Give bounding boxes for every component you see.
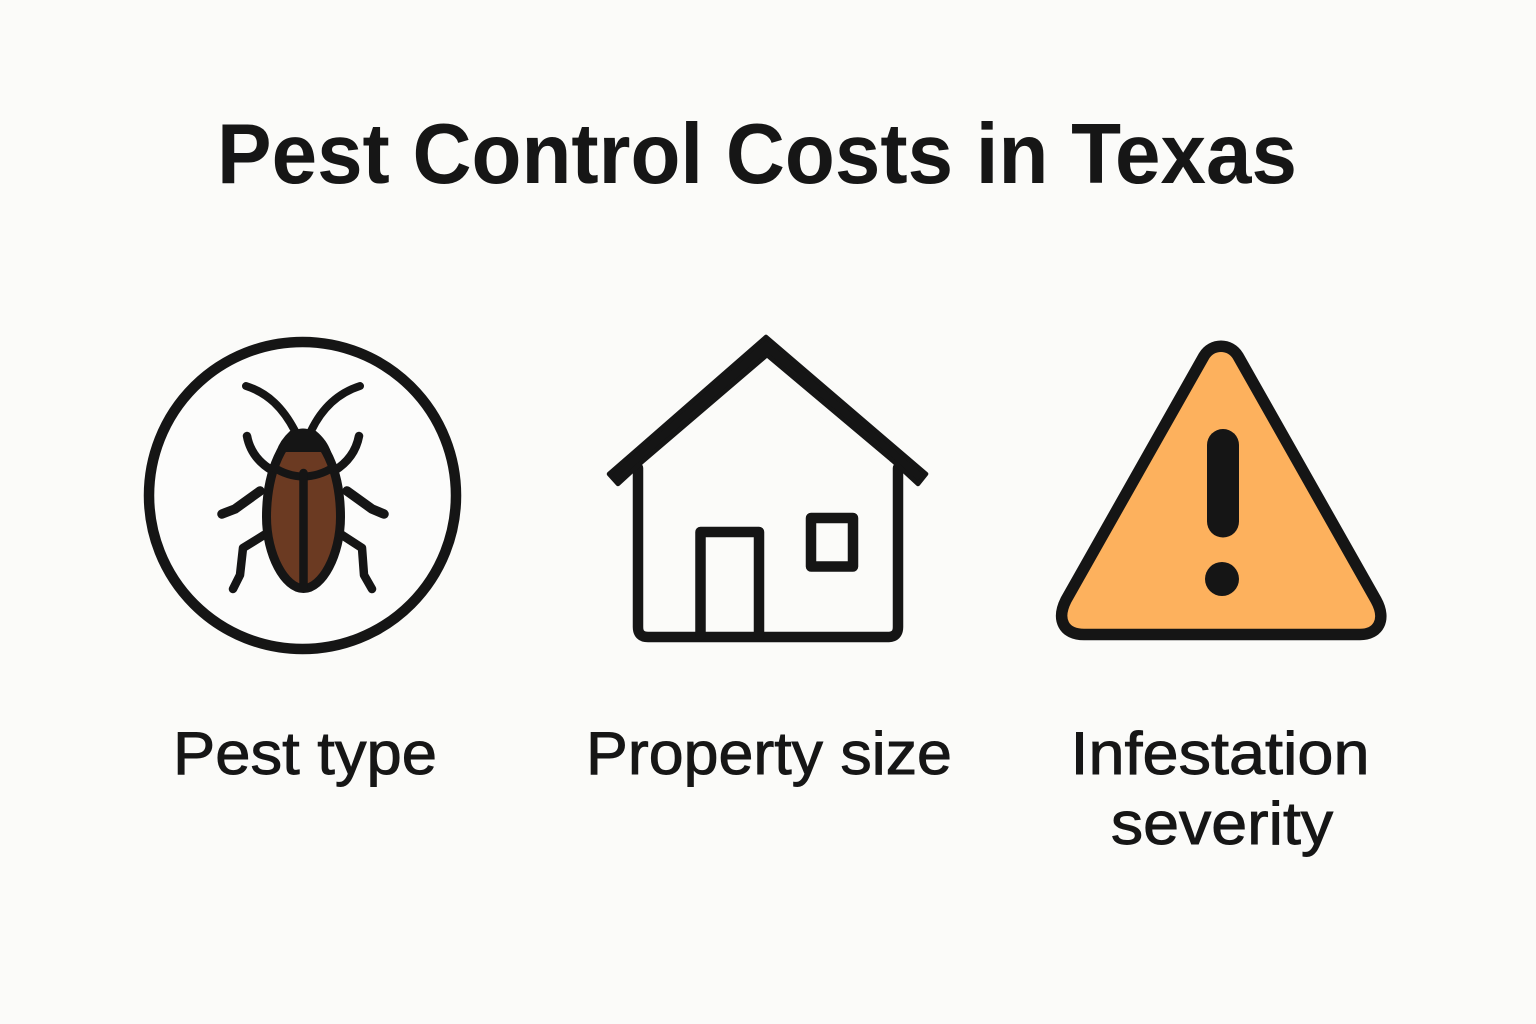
icon: cockroach in circle (144, 336, 462, 654)
icon ring (149, 342, 456, 649)
wing divider (299, 473, 308, 587)
label: property size: Property size (586, 720, 952, 787)
roof (609, 337, 926, 484)
label: infestation severity (1070, 720, 1369, 857)
label: pest type: Pest type (173, 720, 437, 787)
exclamation bar (1207, 429, 1239, 538)
triangle (1062, 346, 1381, 634)
icon: house (606, 334, 928, 642)
walls (638, 468, 898, 637)
head (276, 431, 331, 452)
middle legs (222, 491, 384, 514)
window (811, 518, 853, 566)
title: Pest Control Costs in Texas (217, 107, 1297, 202)
body shell (266, 433, 340, 588)
label: infestation severity: Infestation (1070, 720, 1369, 787)
antennae (246, 386, 360, 431)
upper legs (247, 436, 359, 471)
label: infestation severity: severity (1110, 790, 1333, 857)
lower legs (233, 535, 372, 589)
icon: warning triangle (1056, 340, 1387, 640)
exclamation dot (1205, 562, 1239, 596)
collar (273, 467, 334, 476)
door (700, 532, 759, 635)
